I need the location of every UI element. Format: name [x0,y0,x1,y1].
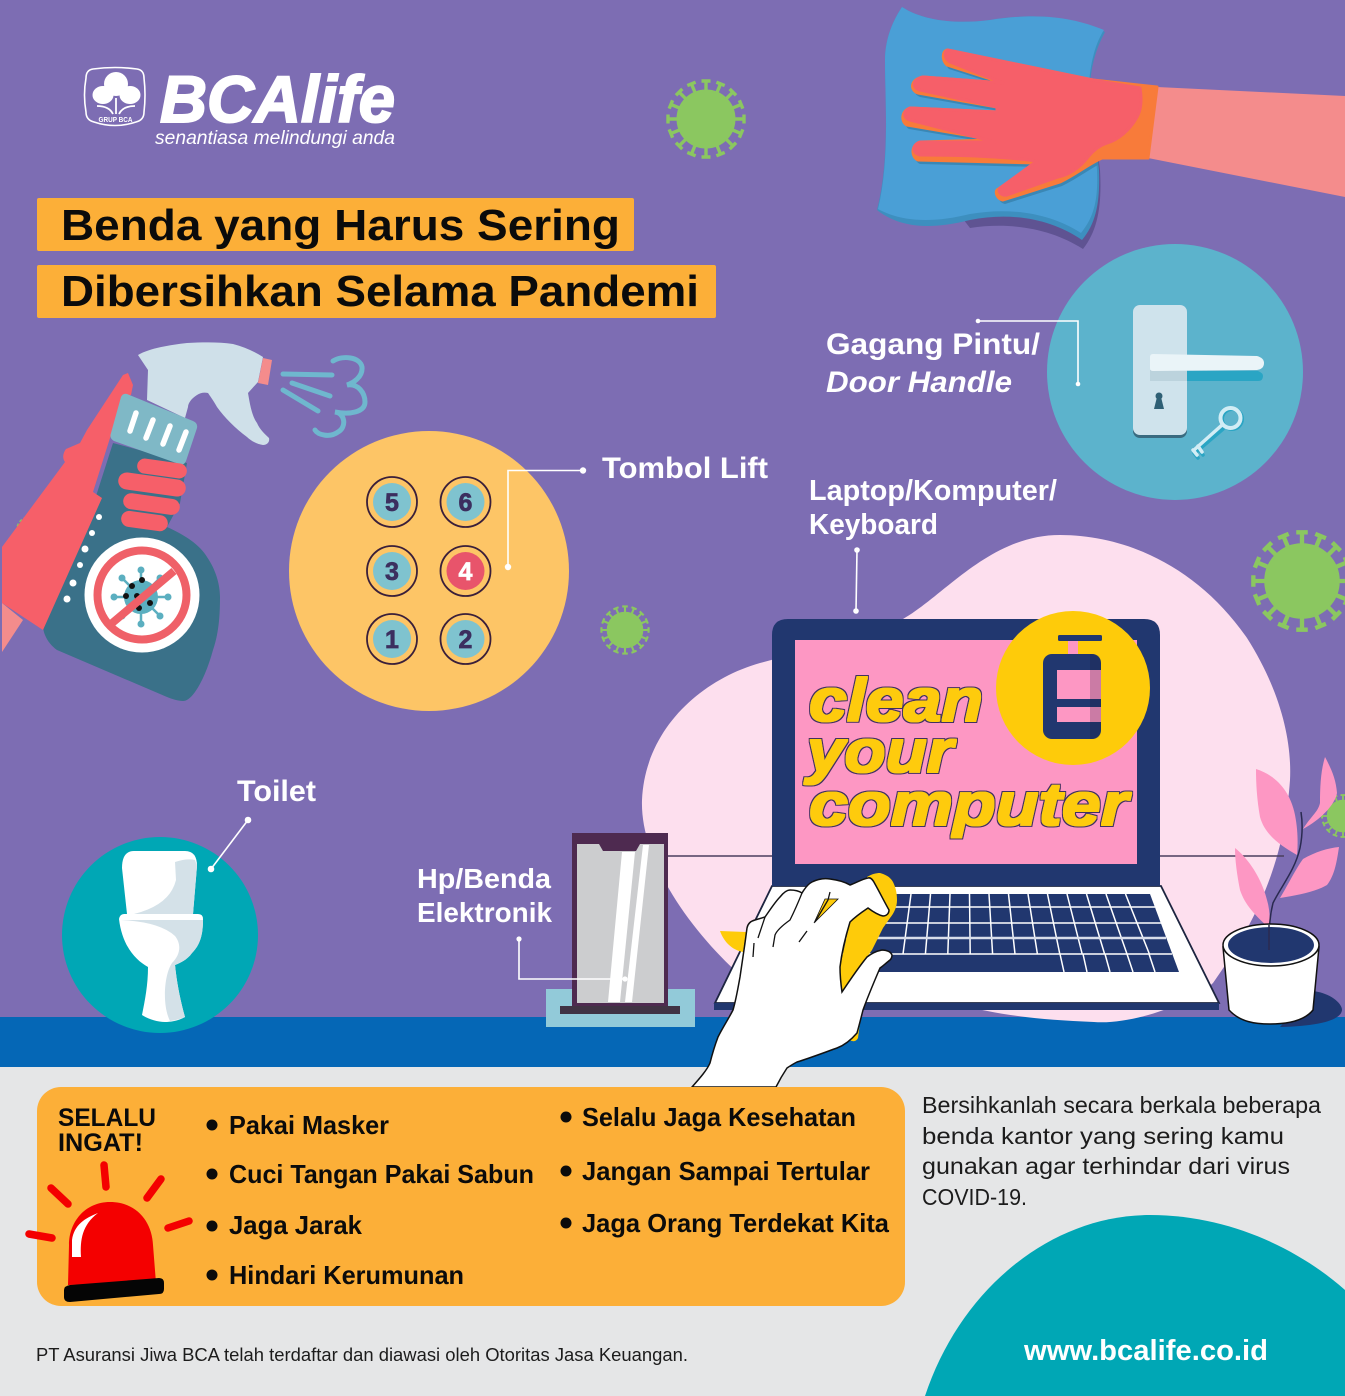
reminder list right: Selalu Jaga Kesehatan [582,1102,856,1132]
illustration: spray bottle in gloved hand [2,342,365,701]
label: door handle: Gagang Pintu/ [826,328,1041,361]
phone foot [560,1006,680,1014]
body text: Bersihkanlah secara berkala beberapa [922,1092,1321,1118]
button 4: 4 [459,558,473,586]
screen message: computer [809,771,1132,838]
virus: middle small [601,606,649,654]
logo wordmark: BCAlife [160,62,395,136]
button 3 [367,546,417,596]
title: Dibersihkan Selama Pandemi [61,267,699,316]
body text: benda kantor yang sering kamu [922,1123,1284,1149]
reminder list right: Jangan Sampai Tertular [582,1156,870,1186]
label: phone: Hp/Benda [417,863,551,894]
body text [922,1092,1321,1210]
button 6 [440,477,490,527]
footer disclaimer: PT Asuransi Jiwa BCA telah terdaftar dan diawasi oleh Otoritas Jasa Keuangan. [36,1345,688,1365]
phone screen [577,844,664,1003]
desk back line [660,855,1284,857]
stem [1269,812,1302,950]
leader: phone [516,936,628,982]
leaves [1235,757,1339,928]
panel: door handle [1047,244,1303,500]
bubbles [64,514,102,602]
panel: reminders [29,1087,905,1306]
pink blob background [642,535,1290,1022]
reminder heading [58,1104,156,1157]
teal corner with website [925,1215,1345,1396]
collar [110,394,197,465]
button 2 [440,614,490,664]
pot shadow [1280,991,1342,1027]
reminder list left: Jaga Jarak [229,1210,363,1240]
cloth [877,7,1105,240]
screen message [804,667,1132,838]
button 5: 5 [385,489,399,517]
trigger [138,342,269,445]
label: phone [417,863,552,928]
phone body [572,833,668,1009]
reminder list left: Pakai Masker [229,1110,389,1140]
logo emblem [84,68,145,126]
panel: phone [546,833,695,1027]
leader: door handle [976,319,1080,386]
cloth bottom corner [847,1023,860,1041]
button 6: 6 [459,489,472,517]
cloth main [840,873,897,992]
illustration: hand with yellow cloth [692,873,897,1087]
button 1 [367,614,417,664]
glove and wrist [2,373,133,630]
bottle body [43,443,220,701]
leader: lift buttons [505,467,586,570]
toilet bowl [119,914,203,1022]
leader: toilet [208,817,251,872]
pot rim [1223,924,1319,966]
finger lines [753,892,830,957]
no virus label [84,538,200,652]
label: toilet: Toilet [237,775,316,808]
reminder list left: Hindari Kerumunan [229,1260,464,1290]
blue desk stripe [0,1017,1345,1068]
sanitizer badge [996,611,1150,765]
door plate [1133,305,1264,438]
virus: right [1253,532,1345,630]
button 3: 3 [385,558,399,586]
reminder list right: Jaga Orang Terdekat Kita [582,1208,890,1238]
toilet tank [122,851,197,914]
grey footer band [0,1067,1345,1396]
reminder heading: SELALU [58,1104,156,1132]
key [1193,408,1242,458]
finger shadows [906,66,1098,204]
cloth shadow [960,90,1100,249]
logo emblem: GRUP BCA [98,117,132,124]
body text: COVID-19. [922,1184,1027,1210]
label: laptop [809,475,1057,541]
sleeve [2,603,23,652]
body text: gunakan agar terhindar dari virus [922,1153,1290,1179]
leader: laptop [853,547,860,614]
laptop lid [772,619,1160,886]
panel: lift buttons [289,431,569,711]
virus: behind plant [1322,795,1345,837]
cloth left corner [720,931,746,952]
label: door handle: Door Handle [826,366,1012,399]
laptop screen [795,640,1137,864]
nozzle [258,358,272,385]
icon: alarm beacon [29,1165,189,1302]
arm [1148,87,1345,197]
virus: behind glove [17,517,43,543]
reminder list right [560,1102,890,1238]
illustration: potted plant [1223,757,1342,1027]
glove base [903,50,1157,200]
illustration: laptop [714,611,1219,1010]
hand [692,878,892,1087]
label: lift buttons: Tombol Lift [602,452,768,485]
reminder list left: Cuci Tangan Pakai Sabun [229,1159,534,1189]
label: laptop: Laptop/Komputer/ [809,475,1057,507]
label: door handle [826,328,1041,399]
logo tagline: senantiasa melindungi anda [155,128,395,149]
screen message: clean [809,667,983,734]
glove fingers [117,458,188,532]
laptop base [715,886,1219,1003]
website url: www.bcalife.co.id [1023,1335,1268,1367]
spray mist [283,358,365,435]
label: laptop: Keyboard [809,509,938,541]
reminder list left [206,1110,534,1290]
title: Benda yang Harus Sering [61,201,620,250]
keyboard [790,894,1179,972]
logo: BCA life [84,62,395,149]
reminder heading: INGAT! [58,1129,143,1157]
button 1: 1 [385,626,399,654]
button 5 [367,477,417,527]
title [37,198,716,318]
virus: top centre [668,81,744,157]
screen message: your [804,718,957,785]
glove top [905,50,1141,195]
button 2: 2 [459,626,472,654]
illustration: gloved hand wiping with cloth [877,7,1345,249]
pot body [1223,947,1319,1024]
cloth between fingers [814,899,838,923]
label: phone: Elektronik [417,897,552,928]
soil [1228,927,1314,963]
button 4 [440,546,490,596]
panel: toilet [62,837,258,1033]
phone stand [546,989,695,1027]
